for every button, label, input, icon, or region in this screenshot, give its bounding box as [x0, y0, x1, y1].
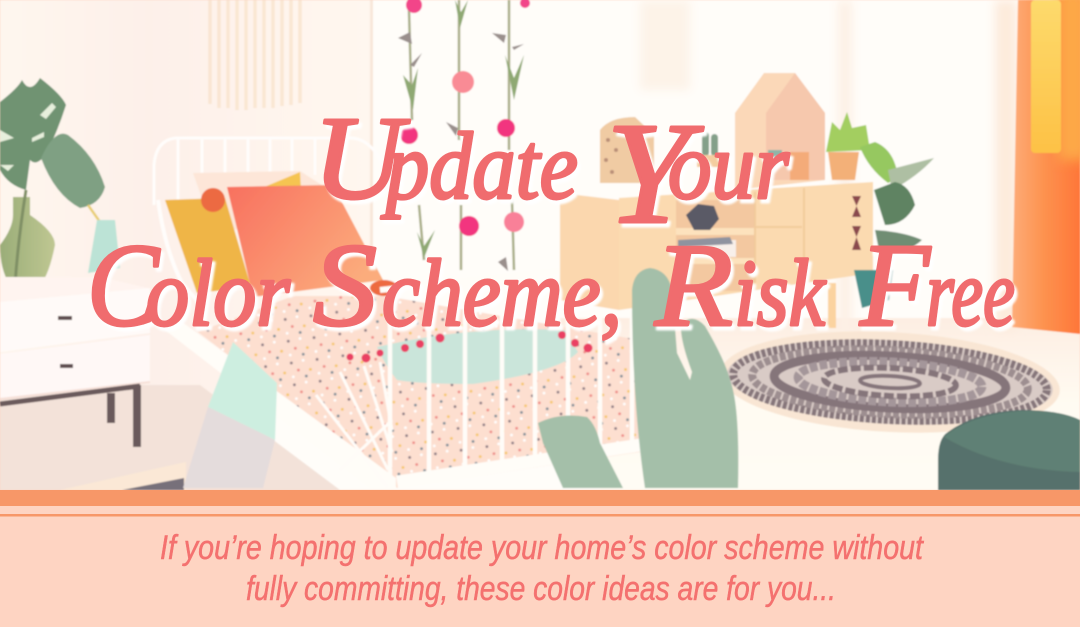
title line 1 [313, 92, 790, 254]
title line 1: pdate [381, 113, 578, 219]
title line 1: Y [606, 94, 704, 254]
bottom panel [0, 506, 1080, 627]
wall hanging tassels [210, 0, 300, 110]
mint pillow with red tassels [346, 329, 592, 384]
mint and grey cushion [183, 342, 277, 488]
title line 2 [87, 219, 1015, 351]
small rug at bottom [60, 462, 186, 490]
bed headboard [154, 138, 405, 310]
subtitle: fully committing, these color ideas are for you... [246, 570, 836, 608]
wooden sideboard [560, 182, 873, 328]
subtitle: If you’re hoping to update your home’s color scheme without [160, 529, 924, 567]
wooden house shelf [735, 73, 825, 190]
orange band [0, 490, 1080, 506]
orange curtain [1012, 0, 1080, 334]
title line 2: S [313, 219, 377, 351]
subtitle [160, 529, 924, 608]
left floor [0, 385, 340, 490]
title line 2: F [859, 219, 931, 351]
title [87, 92, 1015, 351]
center panel edge [370, 0, 373, 280]
flower garlands [398, 0, 530, 271]
cactus and lantern [600, 117, 724, 183]
title line 2: cheme, [382, 240, 622, 346]
mattress [198, 296, 640, 488]
title line 1: our [668, 113, 790, 219]
footboard rails [380, 260, 660, 488]
potted plants [826, 112, 934, 308]
bedroom photo [0, 0, 1080, 490]
rug [718, 323, 1062, 441]
title line 2: olor [146, 240, 291, 346]
green cactus cushion [538, 268, 738, 488]
bed side rail [165, 322, 396, 490]
monstera plant in glass vase [0, 78, 120, 288]
title line 2: R [654, 219, 733, 351]
title line 2: isk [734, 240, 827, 346]
title line 1: U [313, 92, 410, 224]
right floor [560, 318, 1080, 490]
bed footboard fan [316, 362, 392, 488]
sheer curtains [640, 0, 1017, 330]
pouf [938, 410, 1080, 490]
bed back pillows [165, 171, 398, 297]
title line 2: ree [926, 240, 1015, 346]
nightstand [0, 277, 150, 447]
title line 2: C [87, 219, 160, 351]
left wall [0, 0, 372, 395]
